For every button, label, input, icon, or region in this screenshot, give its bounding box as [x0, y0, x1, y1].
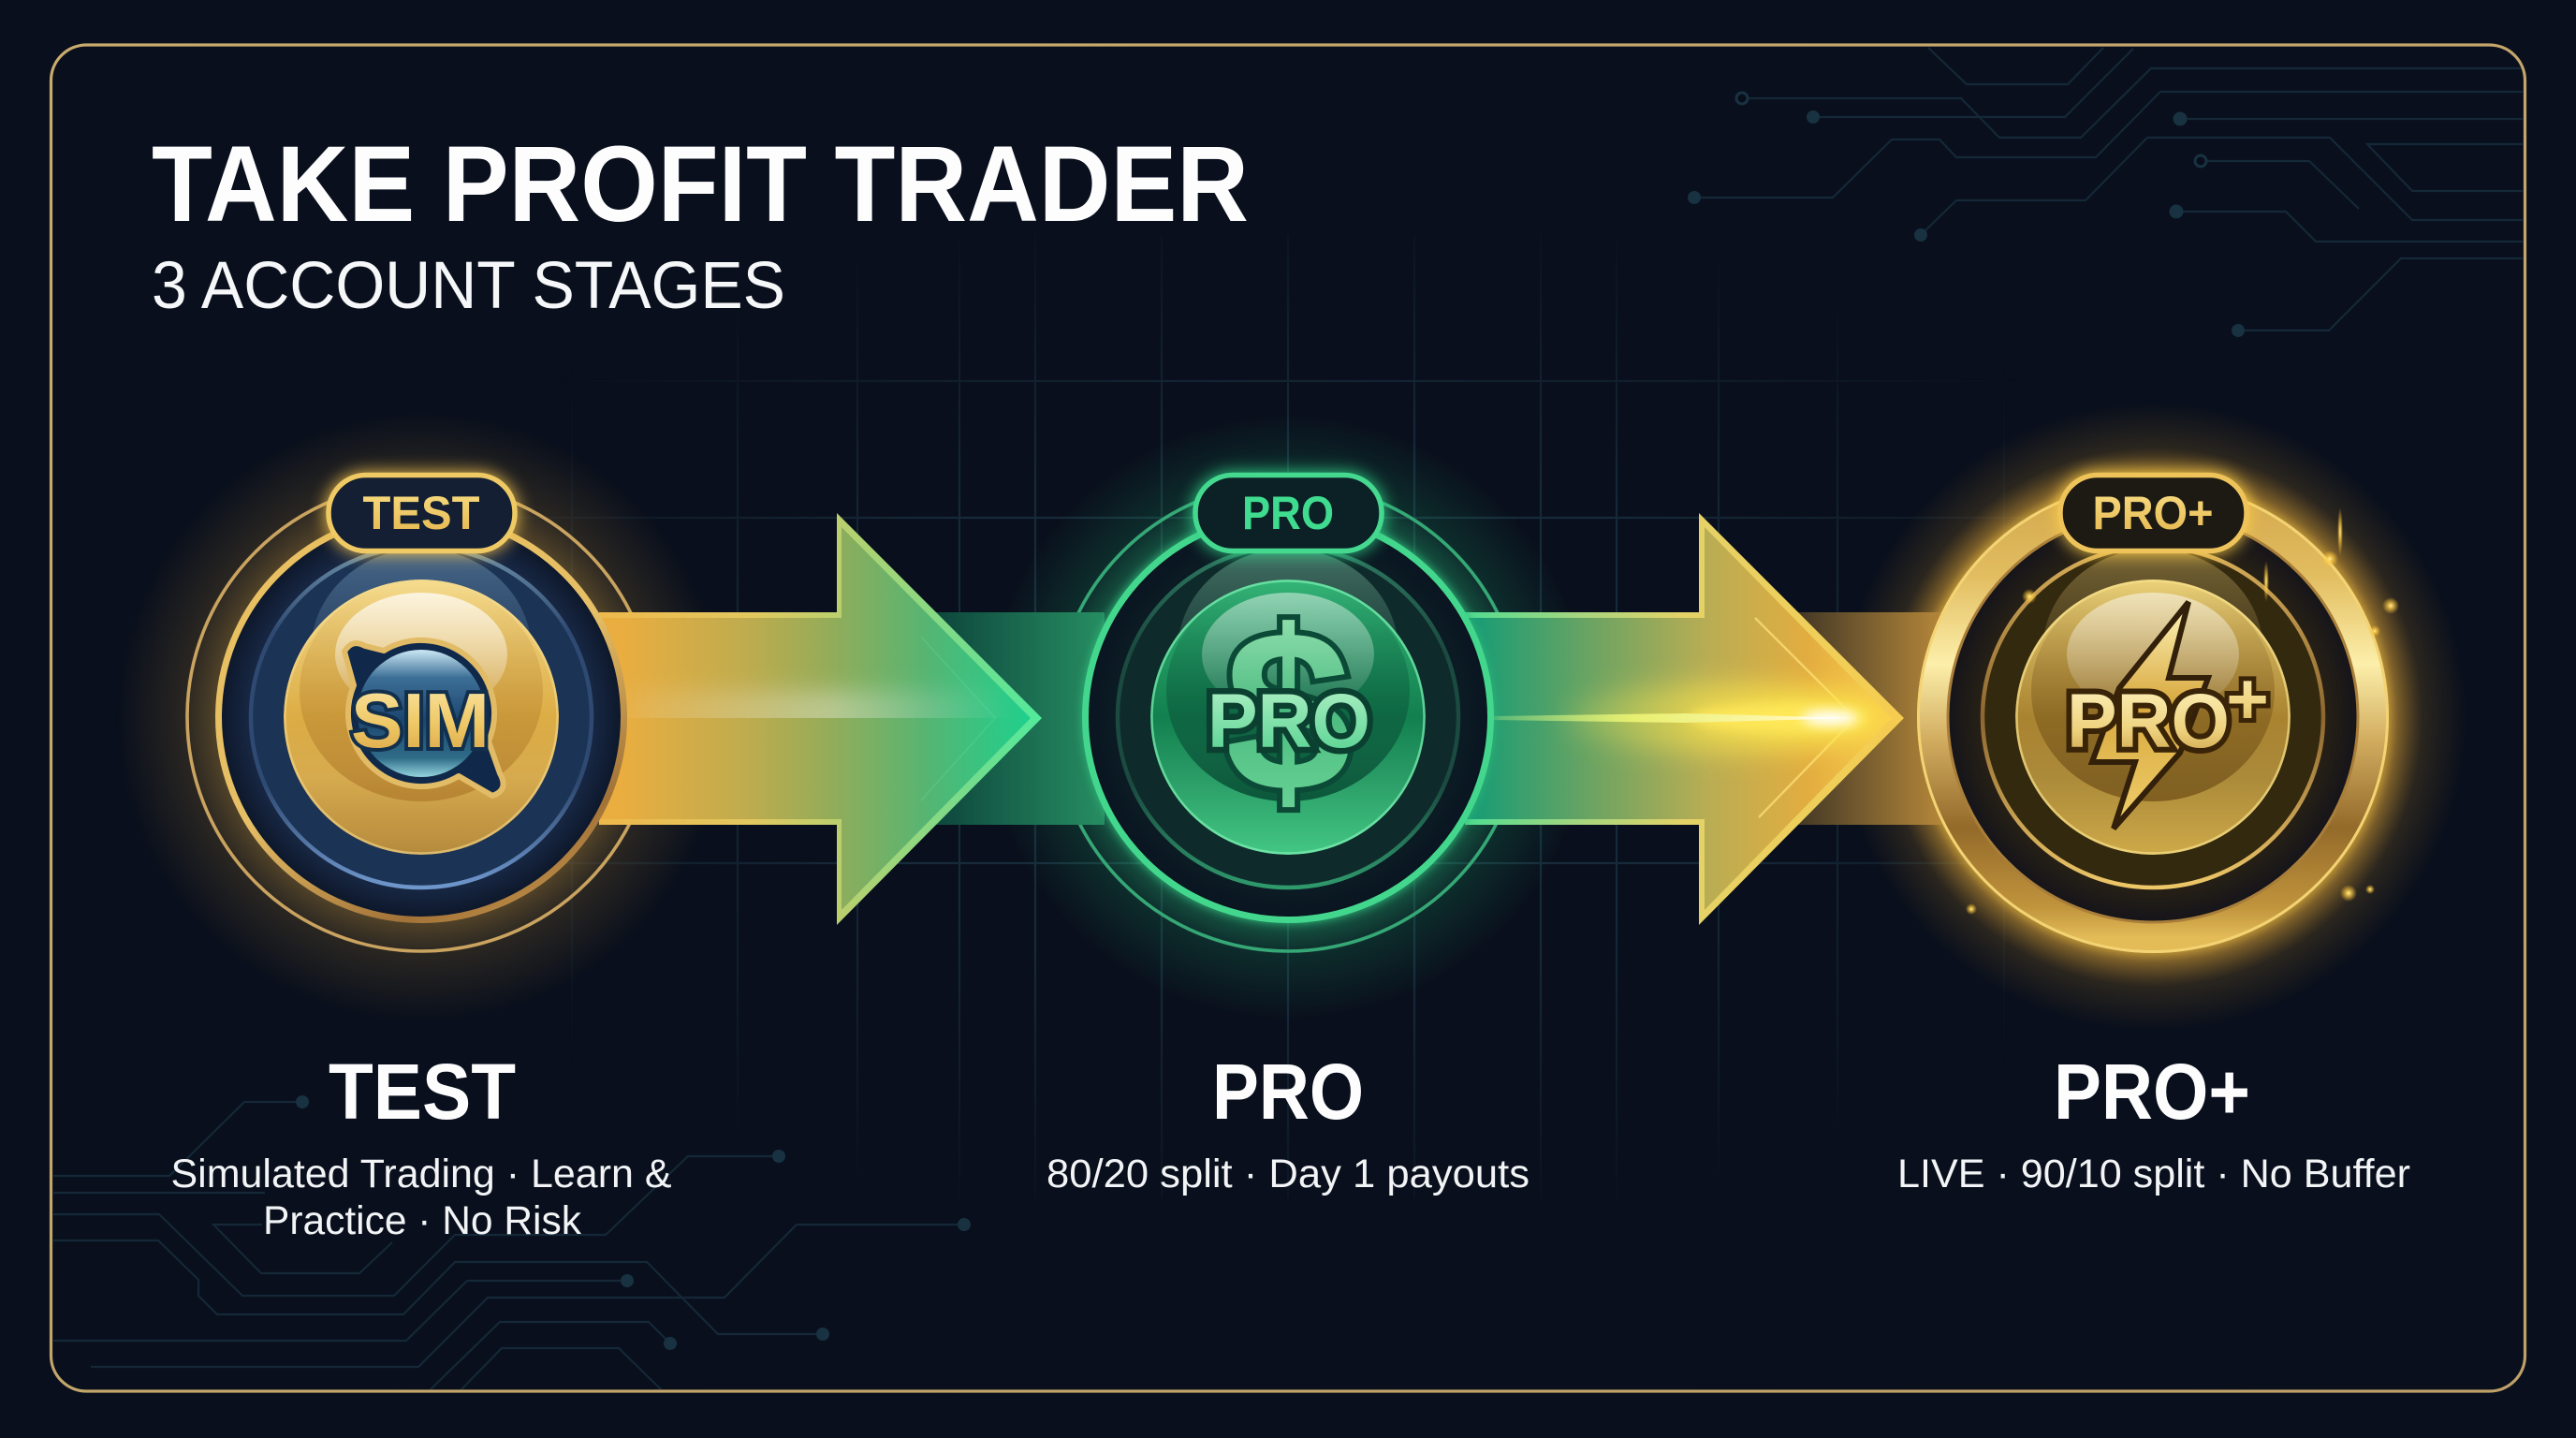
glow and outer ring: test	[117, 413, 725, 1021]
description: pro: 80/20 split · Day 1 payouts	[1046, 1152, 1530, 1196]
pill: pro plus	[2060, 476, 2247, 550]
badge: test	[219, 476, 623, 919]
sphere: test	[284, 580, 559, 855]
heading: PRO+: PRO+	[2054, 1048, 2250, 1136]
pill: test	[329, 476, 515, 550]
title: TAKE PROFIT TRADER	[152, 125, 1249, 244]
subtitle: 3 ACCOUNT STAGES	[152, 249, 785, 323]
sphere wordmark: PRO+: PRO	[2067, 679, 2230, 764]
sphere: pro	[1150, 580, 1426, 855]
heading: TEST: TEST	[329, 1048, 516, 1136]
description: test: Simulated Trading · Learn &	[170, 1152, 672, 1196]
stage label: pro plus	[1897, 1048, 2410, 1196]
connector band: arrow 1 to pro	[936, 612, 1105, 825]
badge: pro	[1086, 476, 1490, 919]
description: test	[170, 1152, 672, 1243]
pill: pro: PRO	[1242, 487, 1334, 539]
stage label: pro	[1046, 1048, 1530, 1196]
sphere wordmark: PRO: PRO	[1208, 679, 1370, 764]
sphere wordmark: PRO+	[2067, 657, 2269, 764]
glow: pro plus	[1839, 404, 2466, 1031]
description: test: Practice · No Risk	[263, 1198, 581, 1243]
heading: PRO: PRO	[1212, 1048, 1364, 1136]
badge: pro plus	[1919, 476, 2387, 951]
sphere wordmark: PRO+: +	[2226, 657, 2269, 740]
icon: dollar sign: $	[1224, 582, 1352, 839]
stage label: test	[170, 1048, 672, 1243]
pill: test: TEST	[363, 487, 479, 539]
glow and outer ring: pro	[984, 413, 1592, 1021]
circuit traces: bottom left	[53, 1095, 971, 1389]
icon: lightning bolt	[2092, 602, 2208, 829]
circuit traces: top right	[1688, 48, 2523, 337]
sphere: pro plus	[2015, 580, 2291, 855]
icon: SIM emblem: SIM	[351, 677, 490, 764]
connector band: arrow 2 to pro plus	[1797, 612, 1956, 825]
pill: pro	[1195, 476, 1382, 550]
pill: pro plus: PRO+	[2093, 487, 2213, 539]
sparkles: pro plus	[1966, 507, 2399, 915]
arrow: pro to pro plus	[1465, 513, 1904, 925]
icon: SIM emblem	[344, 640, 504, 796]
arrow: test to pro	[599, 513, 1042, 925]
description: pro plus: LIVE · 90/10 split · No Buffer	[1897, 1152, 2410, 1196]
